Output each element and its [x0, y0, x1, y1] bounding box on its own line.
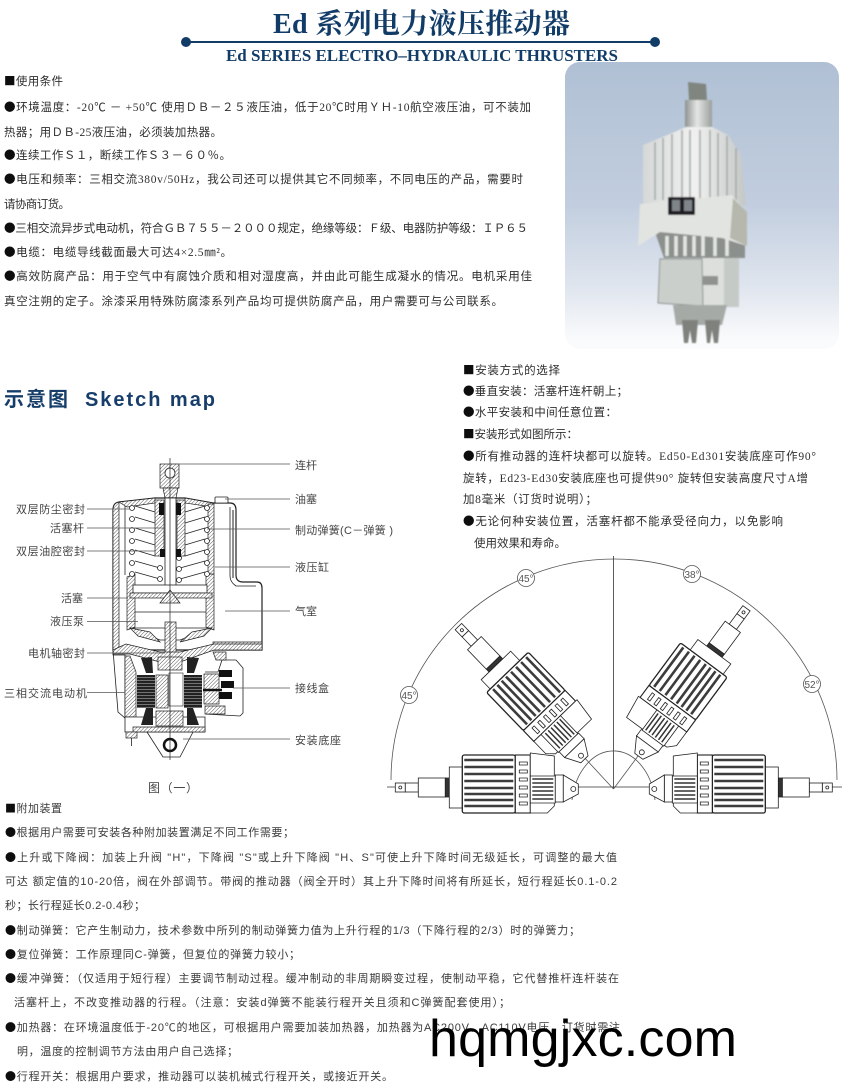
text block: optional accessories: ●制动弹簧：它产生制动力，技术参数中所列的制动弹簧力值为上升行程的1/3（下降行程的2/3）时的弹簧力；: [5, 922, 580, 938]
text block: optional accessories: 可达 额定值的10-20倍，阀在外部调节。带阀的推动器（阀全开时）其上升下降时间将有所延长，短行程延长0.1-0.2: [5, 874, 617, 888]
text block: operating conditions: ●环境温度：-20℃ － +50℃ 使用ＤＢ－２５液压油，低于20℃时用ＹＨ-10航空液压油，可不装加: [4, 99, 531, 115]
text block: installation options: [463, 362, 816, 550]
text block: optional accessories: [5, 800, 620, 1084]
text block: operating conditions: ■使用条件: [4, 73, 63, 89]
title: English subheading: Ed SERIES ELECTRO–HYDRAULIC THRUSTERS: [226, 46, 618, 65]
text block: installation options: 旋转，Ed23-Ed30安装底座也可提供90° 旋转但安装高度尺寸A增: [463, 471, 808, 485]
labels: parts, right side: [295, 458, 393, 747]
text block: installation options: ■安装形式如图所示：: [463, 426, 578, 442]
labels: parts, right side: 安装底座: [295, 733, 341, 747]
icon: thruster product illustration: [638, 82, 747, 343]
text block: operating conditions: [4, 73, 532, 308]
thruster: horizontal left: [395, 753, 578, 813]
text block: installation options: ●所有推动器的连杆块都可以旋转。Ed50-Ed301安装底座可作90°: [463, 448, 816, 464]
text block: installation options: ●垂直安装：活塞杆连杆朝上；: [463, 383, 628, 399]
cross-section: motor housing: [113, 650, 205, 746]
angle badge 45 degrees lower: 45°: [401, 691, 417, 702]
labels: parts, left side: [4, 502, 87, 700]
text block: installation options: ■安装方式的选择: [463, 362, 560, 378]
cross-section: brake spring: [130, 506, 210, 582]
chart: mounting angle diagram: [387, 556, 842, 813]
centerline: [169, 458, 171, 760]
panel: product photo: [565, 62, 839, 349]
cross-section: terminal box: [203, 652, 243, 716]
labels: parts, right side: 油塞: [295, 492, 317, 506]
cross-section: upper housing and air chamber: [113, 497, 262, 650]
thruster: upper-left at 45 degrees: [440, 603, 610, 776]
cross-section: motor stator, rotor and windings: [137, 657, 202, 725]
angle badge 38 degrees: 38°: [684, 570, 700, 581]
cross-section: connecting rod head: [160, 464, 179, 498]
heading: sketch map: 示意图 Sketch map: [4, 387, 215, 411]
labels: parts, right side: 液压缸: [295, 560, 329, 574]
outer arc and axes: [387, 556, 842, 800]
text block: optional accessories: 明，温度的控制调节方法由用户自己选择；: [17, 1044, 238, 1058]
labels: parts, right side: 制动弹簧(C－弹簧 ): [295, 523, 393, 537]
labels: parts, left side: 液压泵: [50, 614, 84, 628]
text block: optional accessories: ■附加装置: [5, 800, 62, 816]
title: Chinese heading: Ed 系列电力液压推动器: [273, 8, 570, 40]
cross-section: hydraulic cylinder walls: [125, 504, 214, 630]
labels: parts, left side: 电机轴密封: [28, 646, 85, 660]
caption: figure one: 图（一）: [148, 781, 198, 795]
chart: thruster cross-section diagram: [4, 458, 393, 795]
angle badge 52 degrees: 52°: [804, 680, 820, 691]
labels: parts, left side: 活塞: [61, 591, 83, 605]
text block: operating conditions: ●电缆：电缆导线截面最大可达4×2.5㎜²。: [4, 244, 232, 260]
text block: optional accessories: 秒；长行程延长0.2-0.4秒；: [5, 898, 145, 912]
labels: parts, left side: 活塞杆: [50, 521, 84, 535]
text block: optional accessories: ●缓冲弹簧：（仅适用于短行程）主要调节制动过程。缓冲制动的非周期瞬变过程，使制动平稳，它代替推杆连杆装在: [5, 970, 619, 986]
angle badge 52 degrees: [804, 676, 820, 692]
cross-section: mounting base: [147, 732, 193, 757]
title rule with end dots: [181, 37, 660, 47]
angle badge 45 degrees upper: [518, 570, 534, 586]
text block: installation options: ●无论何种安装位置，活塞杆都不能承受径向力，以免影响: [463, 513, 783, 529]
watermark: hqmgjxc.com: [429, 1010, 737, 1068]
text block: optional accessories: ●行程开关：根据用户要求，推动器可以装机械式行程开关，或接近开关。: [5, 1068, 393, 1084]
angle badge 45 degrees lower: [400, 686, 418, 704]
text block: operating conditions: 真空注朔的定子。涂漆采用特殊防腐漆系列产品均可提供防腐产品，用户需要可与公司联系。: [4, 294, 503, 308]
angle badge 45 degrees upper: 45°: [518, 574, 534, 585]
labels: parts, left side: 双层油腔密封: [16, 544, 85, 558]
thruster: horizontal right: [649, 753, 832, 813]
leader lines: [87, 464, 290, 739]
text block: installation options: ●水平安装和中间任意位置：: [463, 404, 617, 420]
text block: operating conditions: 热器；用ＤＢ-25液压油，必须装加热器。: [4, 125, 222, 139]
thruster: upper-right at 52 degrees: [610, 588, 767, 771]
text block: optional accessories: ●根据用户需要可安装各种附加装置满足不同工作需要；: [5, 824, 294, 840]
text block: operating conditions: ●电压和频率：三相交流380v/50Hz，我公司还可以提供其它不同频率，不同电压的产品，需要时: [4, 171, 524, 187]
labels: parts, right side: 气室: [295, 604, 317, 618]
text block: optional accessories: ●复位弹簧：工作原理同C-弹簧，但复位的弹簧力较小；: [5, 946, 300, 962]
labels: parts, left side: 双层防尘密封: [16, 502, 85, 516]
angle badge 38 degrees: [684, 566, 700, 582]
cross-section: piston: [130, 585, 212, 612]
text block: operating conditions: ●高效防腐产品：用于空气中有腐蚀介质和相对湿度高，并由此可能生成凝水的情况。电机采用佳: [4, 268, 532, 284]
text block: installation options: 使用效果和寿命。: [474, 536, 566, 550]
text block: operating conditions: 请协商订货。: [4, 197, 70, 211]
text block: operating conditions: ●三相交流异步式电动机，符合ＧＢ７５５－２０００规定，绝缘等级：Ｆ级、电器防护等级：ＩＰ６５: [4, 220, 528, 236]
title: [181, 8, 660, 65]
text block: operating conditions: ●连续工作Ｓ１，断续工作Ｓ３－６０％。: [4, 147, 231, 163]
labels: parts, left side: 三相交流电动机: [4, 686, 87, 700]
labels: parts, right side: 连杆: [295, 458, 317, 472]
text block: optional accessories: ●加热器：在环境温度低于-20℃的地区，可根据用户需要加装加热器，加热器为AC200V、AC110V电压，订货时需注: [5, 1019, 620, 1035]
cross-section: hydraulic pump: [113, 622, 262, 662]
text block: optional accessories: 活塞杆上，不改变推动器的行程。（注意：安装d弹簧不能装行程开关且须和C弹簧配套使用）；: [14, 995, 510, 1009]
text block: optional accessories: ●上升或下降阀：加装上升阀 "H"，下降阀 "S"或上升下降阀 "H、S"可使上升下降时间无级延长，可调整的最大值: [5, 849, 617, 865]
text block: installation options: 加8毫米（订货时说明）；: [463, 492, 597, 506]
labels: parts, right side: 接线盒: [295, 681, 329, 695]
cross-section: piston rod, sleeves and seals: [155, 498, 185, 586]
